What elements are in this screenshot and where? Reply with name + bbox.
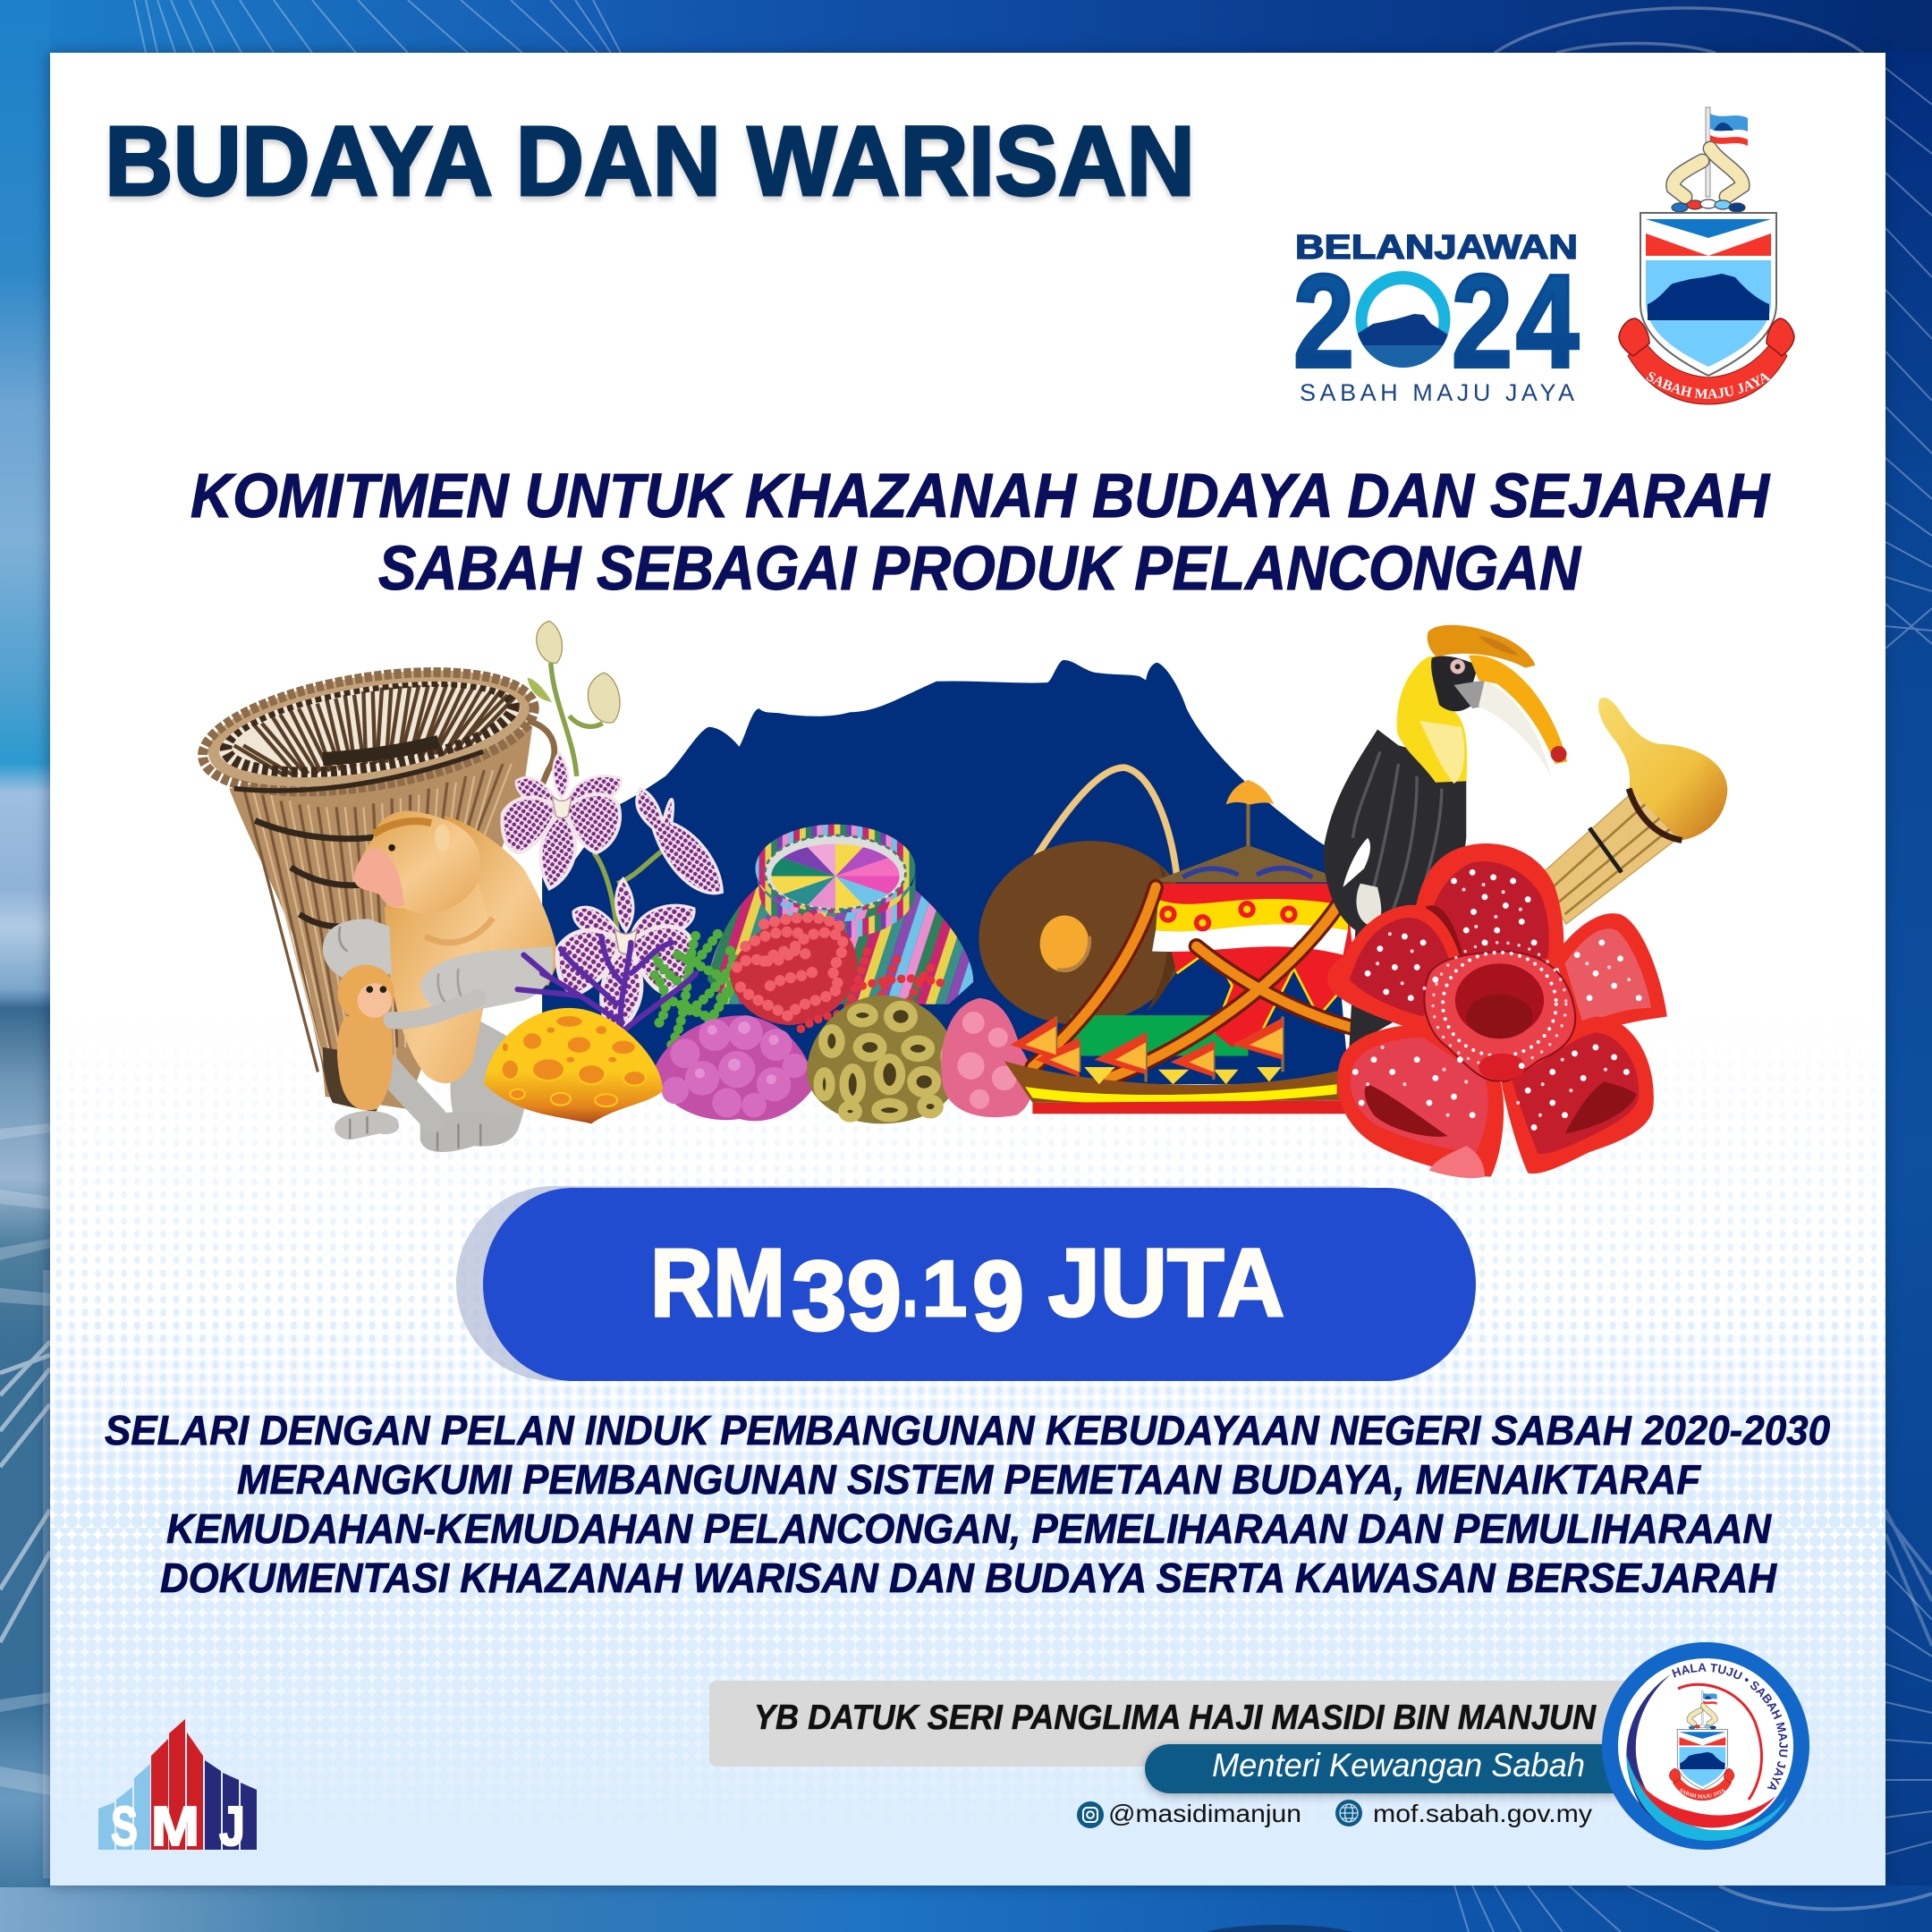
website: mof.sabah.gov.my (1373, 1800, 1592, 1827)
shield (1640, 213, 1776, 376)
text block: programme description: SELARI DENGAN PELAN INDUK PEMBANGUNAN KEBUDAYAAN NEGERI SABAH 2020-2030 (105, 1407, 1830, 1453)
logo: SMJ: J (219, 1796, 245, 1858)
icon: orchid spray (503, 621, 722, 1035)
logo: SMJ: S (111, 1796, 138, 1858)
icon: proboscis monkey (323, 810, 558, 1152)
logo: Belanjawan 2024 (1293, 229, 1579, 406)
ribbon: motto: SABAH MAJU JAYA (1646, 372, 1771, 399)
logo: SMJ: M (151, 1796, 199, 1858)
illustration: Sabah cultural collage (194, 621, 1727, 1178)
small coat of arms (1669, 1690, 1734, 1801)
seal: Hala Tuju Sabah Maju Jaya (1602, 1642, 1809, 1850)
teal title bar (1145, 1744, 1628, 1793)
flag (1706, 107, 1748, 197)
crest: beads (1672, 199, 1745, 212)
heading: commitment statement (191, 461, 1770, 603)
sub-element: white petal spots (1355, 872, 1639, 1127)
sub-element: left petal (1327, 905, 1466, 1032)
icon: yellow brain coral (484, 1008, 663, 1123)
icon: red coral (730, 914, 949, 1035)
logo numerals: 2024 (1295, 271, 1580, 369)
text block: programme description (105, 1407, 1830, 1601)
grey name bar (709, 1681, 1640, 1767)
sub-element: baby monkey (337, 965, 478, 1111)
heading: commitment statement: SABAH SEBAGAI PRODUK PELANCONGAN (378, 533, 1581, 603)
icon: sape lute (1538, 698, 1727, 924)
minister title: Menteri Kewangan Sabah (1212, 1747, 1585, 1784)
logo numerals: 2024: 2 (1293, 248, 1354, 395)
seal text: HALA TUJU • SABAH MAJU JAYA (1672, 1664, 1788, 1790)
sub-element: centre disc (1424, 943, 1575, 1081)
icon: globe (1335, 1800, 1362, 1826)
icon: magenta coral (653, 1015, 816, 1121)
sub-element: top petal (1412, 843, 1563, 979)
amount text: JUTA (1048, 1228, 1284, 1336)
name plate: minister (709, 1681, 1640, 1828)
amount text: 39 (792, 1241, 902, 1352)
amount text: 1 (922, 1244, 967, 1333)
text block: programme description: KEMUDAHAN-KEMUDAHAN PELANCONGAN, PEMELIHARAAN DAN PEMULIHARAAN (166, 1505, 1772, 1552)
icon: Mount Kinabalu (542, 660, 1349, 1084)
icon: brass gong (962, 767, 1207, 1044)
amount text (650, 1228, 1284, 1352)
icon: rhinoceros hornbill (1323, 625, 1567, 1047)
ribbon: motto (1618, 318, 1795, 404)
crest: hands (1674, 148, 1742, 197)
logo numerals: 2024: 4 (1516, 248, 1579, 395)
amount text: 9 (972, 1241, 1024, 1352)
title: BUDAYA DAN WARISAN (105, 106, 1195, 216)
amount text: . (902, 1228, 918, 1336)
logo text: tagline: SABAH MAJU JAYA (1300, 379, 1574, 406)
sub-element: lower-left petal (1337, 1025, 1504, 1178)
sub-element: lower-right petal (1499, 1016, 1654, 1174)
text block: programme description: MERANGKUMI PEMBANGUNAN SISTEM PEMETAAN BUDAYA, MENAIKTARAF (237, 1456, 1702, 1503)
text block: programme description: DOKUMENTASI KHAZANAH WARISAN DAN BUDAYA SERTA KAWASAN BERSEJARAH (160, 1555, 1777, 1601)
icon: decorated lepa boat (1004, 780, 1361, 1114)
instagram handle: @masidimanjun (1108, 1800, 1301, 1827)
logo: Sabah coat of arms (1618, 107, 1795, 404)
icon: woven tudung hat (707, 825, 973, 1004)
icon: rafflesia flower (1327, 843, 1667, 1178)
logo text: belanjawan: BELANJAWAN (1295, 229, 1578, 267)
amount pill: RM39.19 JUTA (456, 1186, 1476, 1381)
minister name: YB DATUK SERI PANGLIMA HAJI MASIDI BIN MANJUN (754, 1699, 1597, 1737)
icon: olive star coral (807, 996, 959, 1123)
amount text: RM (650, 1228, 785, 1336)
sub-element: right petal (1555, 913, 1667, 1041)
icon: rattan basket (194, 652, 555, 1113)
icon: purple and green sea fans (518, 930, 743, 1045)
heading: commitment statement: KOMITMEN UNTUK KHAZANAH BUDAYA DAN SEJARAH (191, 461, 1770, 530)
icon: instagram (1077, 1801, 1104, 1828)
logo: SMJ (98, 1719, 257, 1858)
icon: pink coral (941, 998, 1033, 1117)
logo numerals: 2024: 2 (1452, 248, 1513, 395)
